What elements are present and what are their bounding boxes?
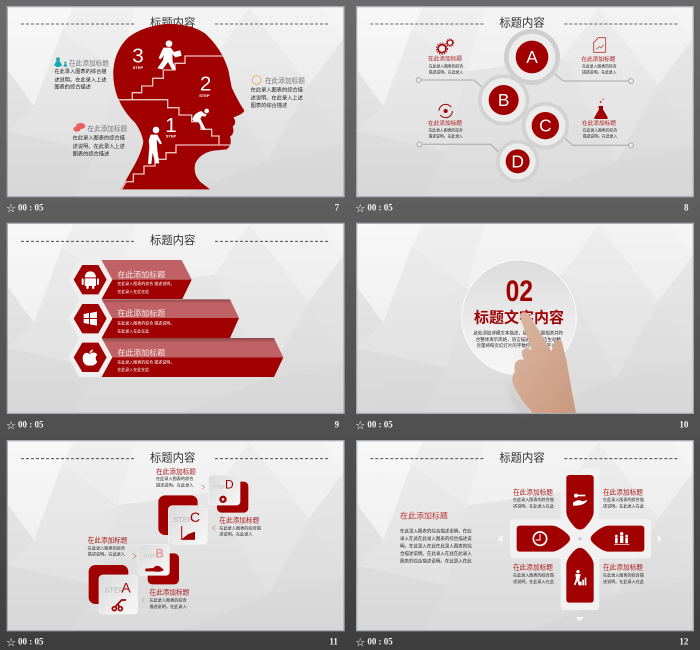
step B tile: STEP	[143, 553, 157, 559]
callout: teal people	[54, 57, 109, 91]
head silhouette with stairs: STEP	[199, 93, 210, 98]
text block: cycle	[428, 104, 463, 138]
step B tile: B	[156, 546, 164, 560]
ribbon 1: 在此录入在此在此	[117, 288, 149, 294]
hand pointing	[509, 312, 576, 413]
text block bottom right: 在此添加标题	[603, 563, 643, 572]
petal: left with clock	[517, 526, 570, 552]
text block B	[88, 536, 136, 558]
text block D	[156, 467, 205, 489]
ribbon 2	[102, 299, 239, 338]
callout: red speech bubbles: 在此录入图表的综合描	[73, 134, 125, 142]
text block: document	[581, 38, 617, 74]
step B tile	[138, 544, 179, 584]
footer	[356, 420, 689, 431]
footer: 00 : 05	[367, 202, 393, 212]
callout: orange timer: 在此添加标题	[265, 76, 305, 85]
text block B: 在此录入图表的综合	[88, 544, 126, 550]
callout: orange timer: 述说明。在此录入上述	[251, 94, 304, 102]
slide 11: steps A to D	[6, 441, 344, 647]
text block bottom left: 在此录入图表的综合描	[513, 572, 554, 578]
left text block: 录入在此在此录入图表的综合描述说	[400, 535, 472, 542]
text block bottom right: 在此录入图表的综合描	[603, 572, 644, 578]
petal: right with people	[591, 526, 644, 552]
text block A: 在此添加标题	[149, 588, 190, 597]
disc with section title: 标题文字内容	[474, 308, 564, 326]
slide background	[7, 441, 344, 631]
head silhouette with stairs: 3	[132, 45, 144, 68]
ribbon 2: 在此录入图表的综合 描述说明。	[117, 320, 174, 326]
head silhouette with stairs: 2	[200, 73, 211, 96]
slide background	[7, 7, 344, 197]
text block: gears: 在此录入图表的综合	[429, 63, 463, 68]
text block D: 在此添加标题	[156, 467, 196, 476]
text block: document: 描述说明。在此录入	[582, 69, 617, 74]
footer: ☆	[356, 637, 365, 647]
text block D: 在此录入图表的综合	[156, 475, 194, 481]
footer: 00 : 05	[367, 420, 393, 430]
text block: gears	[428, 39, 463, 74]
text block: gears: 在此添加标题	[428, 54, 462, 62]
text block C: 在此录入图表的综合描	[219, 524, 261, 530]
slide 7: head staircase	[6, 7, 344, 213]
ribbon 2: 在此添加标题	[117, 308, 165, 318]
petal: top with key and hand	[566, 475, 594, 529]
text block top left: 述说明。在此录入在此	[513, 502, 554, 508]
slide background	[357, 223, 693, 413]
footer: 00 : 05	[18, 637, 44, 647]
text block A	[142, 588, 190, 609]
step D tile: D	[225, 478, 234, 492]
left text block: 图表的综合描述说明。在此录入在此	[400, 557, 472, 564]
head silhouette with stairs: STEP	[133, 65, 144, 70]
text block C: 在此添加标题	[219, 515, 260, 524]
ribbon 3: 在此添加标题	[117, 347, 165, 357]
footer	[6, 637, 338, 647]
circle B: B	[498, 90, 509, 110]
callout: teal people: 图表的综合描述	[54, 83, 92, 91]
callout: teal people: 述说明。在此录入上述	[54, 75, 107, 83]
callout: orange timer: 图表的综合描述	[251, 101, 288, 109]
callout: teal people: 在此录入图表的综合描	[54, 67, 107, 75]
text block: flask: 在此录入图表的综合	[583, 127, 617, 132]
circle B	[478, 74, 529, 126]
step D tile	[208, 475, 248, 513]
text block bottom left: 述说明。在此录入在此	[513, 578, 554, 584]
text block bottom right: 述说明。在此录入在此	[603, 578, 644, 584]
text block bottom left: 在此添加标题	[513, 563, 553, 572]
text block: flask: 在此添加标题	[582, 119, 616, 127]
left text block: 合描述说明。在此录入在此在此录入	[400, 550, 472, 557]
side markers	[498, 535, 662, 621]
step A tile: A	[121, 580, 131, 596]
text block: cycle: 在此录入图表的综合	[428, 127, 463, 132]
heading: 标题内容	[499, 450, 545, 464]
footer: 12	[679, 637, 689, 647]
ribbon 1	[102, 260, 192, 299]
footer: ☆	[356, 421, 365, 431]
text block: document: 在此录入图表的综合	[582, 63, 617, 68]
footer: 00 : 05	[18, 420, 44, 430]
step C tile	[158, 495, 207, 544]
head silhouette with stairs: STEP	[166, 134, 177, 139]
slide 12: cross diagram	[356, 441, 693, 647]
text block top left: 在此录入图表的综合描	[513, 496, 554, 502]
ribbon 1: 在此录入图表的综合 描述说明。	[117, 280, 174, 286]
circle D	[496, 140, 539, 183]
left text block: 在此添加标题	[400, 511, 448, 521]
text block top right	[603, 487, 644, 508]
left text block: 明。在此录入在此在此录入图表的综	[400, 543, 472, 550]
text block A: 在此录入图表的综合	[149, 597, 188, 603]
text block: cycle: 描述说明。在此录入	[428, 133, 463, 138]
figure: walking with briefcase	[157, 40, 182, 69]
footer	[6, 420, 340, 431]
step C tile: STEP	[173, 515, 193, 524]
footer: 11	[329, 637, 338, 647]
footer	[6, 202, 340, 213]
step D tile: STEP	[213, 485, 225, 490]
callout: orange timer: 在此录入图表的综合描	[251, 85, 303, 93]
slide 10: section cover	[356, 223, 693, 431]
step C tile: C	[190, 509, 200, 525]
footer: 00 : 05	[367, 637, 393, 647]
footer: ☆	[356, 203, 365, 213]
footer: ☆	[6, 203, 16, 213]
figure: seated thinker	[192, 109, 209, 130]
hexagon: apple	[68, 338, 112, 377]
footer: 7	[335, 202, 340, 212]
text block: gears: 描述说明。在此录入	[429, 69, 463, 74]
slide background	[357, 441, 693, 631]
callout: orange timer	[251, 76, 305, 109]
circle A: A	[526, 47, 538, 67]
footer: ☆	[6, 637, 16, 647]
text block B: 在此添加标题	[88, 536, 128, 545]
disc with section title: 尽量将每页幻灯片的字数控制在200字以内	[476, 342, 561, 349]
callout: red speech bubbles: 述说明。在此录入上述	[73, 142, 126, 150]
ribbon 3: 在此录入在此在此	[117, 366, 149, 372]
text block top left: 在此添加标题	[513, 487, 553, 496]
heading: 标题内容	[499, 16, 545, 30]
hexagon: android	[68, 260, 112, 299]
centre dot	[578, 537, 582, 540]
callout: red speech bubbles: 图表的综合描述	[73, 149, 110, 157]
footer: 9	[335, 420, 340, 430]
ribbon 3: 在此录入图表的综合 描述说明。	[117, 358, 174, 364]
figure: climbing	[148, 127, 162, 164]
heading: 标题内容	[150, 233, 195, 247]
left text block	[400, 511, 472, 564]
circle C	[522, 102, 569, 149]
text block B: 描述说明。在此录入	[88, 551, 125, 557]
hexagon: windows	[68, 299, 112, 338]
head silhouette with stairs	[113, 24, 244, 189]
step A tile: STEP	[105, 586, 124, 595]
text block bottom right	[603, 563, 644, 584]
text block: flask	[582, 99, 617, 138]
disc with section title: 此处添加详细文本描述，建议与标题相关并符	[473, 329, 564, 336]
circle C: C	[539, 116, 552, 136]
ribbon 3	[102, 338, 283, 377]
disc with section title	[462, 260, 576, 375]
text block A: 描述说明。在此录入	[149, 603, 187, 609]
text block bottom left	[513, 563, 554, 584]
slide 8: ABCD circles	[356, 7, 693, 213]
text block: document: 在此添加标题	[581, 55, 616, 63]
connector lines	[416, 74, 633, 153]
text block top right: 在此添加标题	[603, 487, 643, 496]
head silhouette with stairs: 1	[165, 114, 177, 137]
cross backing	[510, 468, 651, 610]
text block D: 描述说明。在此录入	[156, 481, 193, 487]
slide background	[357, 7, 693, 197]
petal: bottom with figure and bars	[566, 548, 594, 603]
text block top right: 在此录入图表的综合描	[603, 496, 644, 502]
heading: 标题内容	[150, 16, 195, 30]
text block: flask: 描述说明。在此录入	[583, 133, 617, 138]
text block C	[212, 515, 261, 536]
ribbon 1: 在此添加标题	[117, 269, 165, 279]
footer: 00 : 05	[18, 202, 44, 212]
slide background	[7, 223, 344, 413]
callout: teal people: 在此添加标题	[69, 59, 109, 68]
circle D: D	[511, 151, 524, 171]
circle A	[504, 29, 560, 85]
footer	[356, 202, 689, 213]
left text block: 在此录入图表的综合描述说明。在此	[400, 527, 472, 534]
slide 9: hexagon ribbons	[6, 223, 344, 431]
footer	[356, 637, 689, 647]
footer: 8	[684, 202, 689, 212]
text block: cycle: 在此添加标题	[428, 119, 462, 127]
text block top left	[513, 487, 554, 508]
disc with section title: 合整体演示风格，语言描述尽量简洁生动精	[476, 336, 561, 343]
step A tile	[89, 565, 138, 614]
footer: 10	[679, 420, 689, 430]
heading: 标题内容	[150, 450, 195, 464]
footer: ☆	[6, 421, 16, 431]
text block C: 述说明。在此录入	[219, 530, 253, 536]
disc with section title: 02	[506, 275, 533, 308]
callout: red speech bubbles: 在此添加标题	[87, 124, 128, 133]
text block top right: 述说明。在此录入在此	[603, 502, 644, 508]
ribbon 2: 在此录入在此在此	[117, 328, 149, 334]
callout: red speech bubbles	[73, 123, 128, 157]
